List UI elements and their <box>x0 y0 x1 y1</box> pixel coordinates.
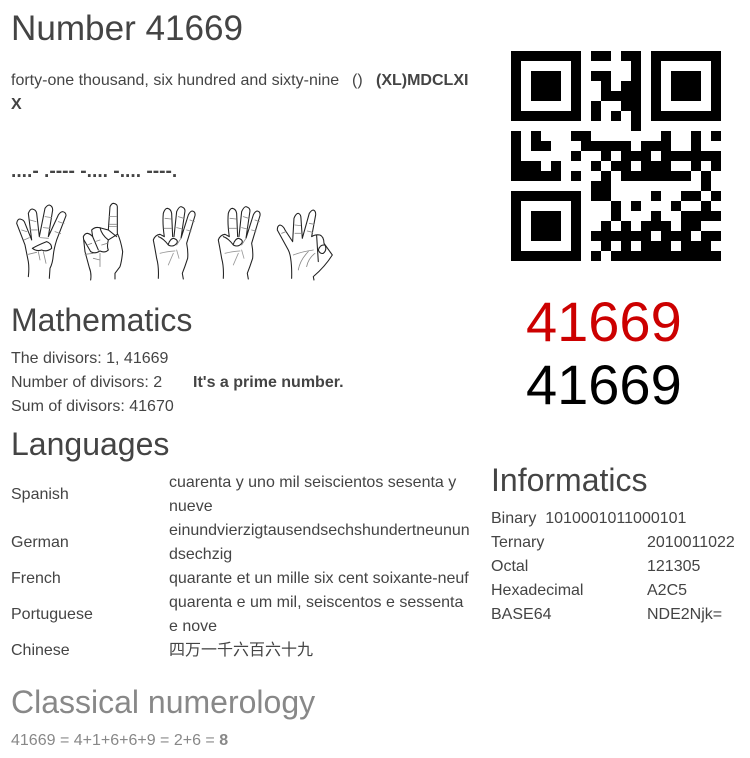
informatics table: NDE2Njk= <box>647 606 722 623</box>
informatics table: 2010011022 <box>647 534 735 551</box>
icon: sign language hands <box>16 202 333 280</box>
number in words and roman numeral: X <box>11 96 22 113</box>
mathematics facts: It's a prime number. <box>193 374 344 391</box>
title: Number 41669 <box>11 9 243 48</box>
mathematics facts: The divisors: 1, 41669 <box>11 350 168 367</box>
languages table: cuarenta y uno mil seiscientos sesenta y <box>169 474 456 491</box>
languages table: 四万一千六百六十九 <box>169 642 313 659</box>
number in words and roman numeral: forty-one thousand, six hundred and sixty-nine <box>11 72 339 89</box>
number in words and roman numeral <box>11 72 468 113</box>
icon: hand one <box>83 203 123 280</box>
number in words and roman numeral: (XL)MDCLXI <box>376 72 468 89</box>
informatics table: BASE64 <box>491 606 551 623</box>
number in words and roman numeral: () <box>352 72 363 89</box>
languages table: Portuguese <box>11 606 93 623</box>
informatics table: Binary 1010001011000101 <box>491 510 686 527</box>
large black number: 41669 <box>526 353 682 416</box>
languages table: quarenta e um mil, seiscentos e sessenta <box>169 594 463 611</box>
mathematics facts: Number of divisors: 2 <box>11 374 162 391</box>
informatics table <box>491 510 735 623</box>
heading: classical numerology: Classical numerology <box>11 684 315 720</box>
languages table: German <box>11 534 69 551</box>
icon: hand with open palm fingers <box>277 210 332 280</box>
informatics table: Octal <box>491 558 528 575</box>
languages table: Chinese <box>11 642 70 659</box>
languages table: Spanish <box>11 486 69 503</box>
languages table: einundvierzigtausendsechshundertneunun <box>169 522 470 539</box>
QR code <box>511 51 721 261</box>
languages table: quarante et un mille six cent soixante-neuf <box>169 570 469 587</box>
heading: mathematics: Mathematics <box>11 302 192 338</box>
informatics table: 121305 <box>647 558 700 575</box>
mathematics facts: Sum of divisors: 41670 <box>11 398 174 415</box>
informatics table: Ternary <box>491 534 544 551</box>
heading: informatics: Informatics <box>491 462 647 498</box>
languages table: e nove <box>169 618 217 635</box>
icon: hand with three raised fingers, right <box>218 207 260 279</box>
languages table: nueve <box>169 498 213 515</box>
languages table <box>11 474 470 659</box>
mathematics facts <box>11 350 344 415</box>
large red number: 41669 <box>526 290 682 353</box>
informatics table: Hexadecimal <box>491 582 583 599</box>
morse code: ....- .---- -.... -.... ----. <box>11 161 177 182</box>
languages table: French <box>11 570 61 587</box>
heading: languages: Languages <box>11 426 169 462</box>
icon: hand four <box>17 205 66 278</box>
languages table: dsechzig <box>169 546 232 563</box>
icon: hand with three raised fingers, left <box>153 207 195 279</box>
numerology calculation: 41669 = 4+1+6+6+9 = 2+6 = 8 <box>11 732 228 749</box>
informatics table: A2C5 <box>647 582 687 599</box>
